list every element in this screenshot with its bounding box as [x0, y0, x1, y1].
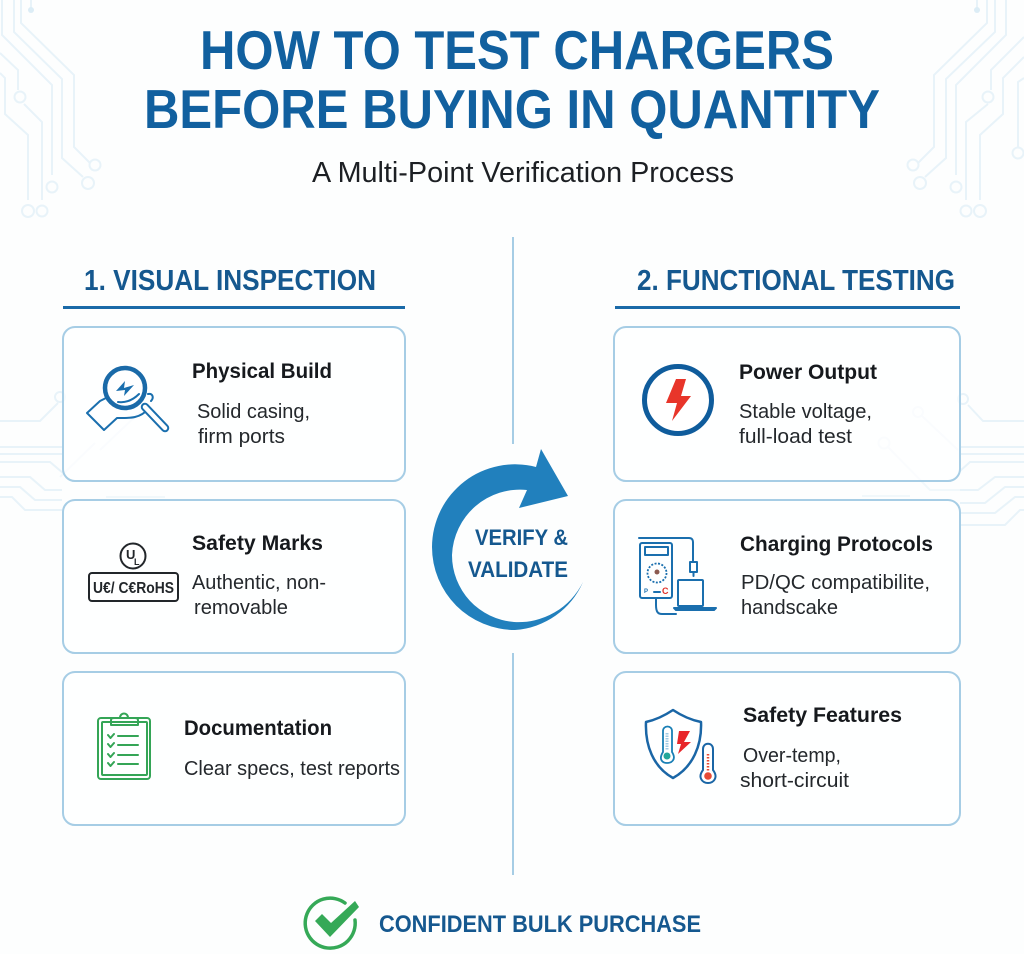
- panel: safety marks: Safety Marks: [192, 532, 323, 555]
- panel: power output: [614, 327, 960, 481]
- heading: functional testing: [615, 265, 960, 309]
- panel: documentation: Clear specs, test reports: [184, 757, 400, 780]
- icon: clipboard checklist: [98, 714, 150, 779]
- subtitle: A Multi-Point Verification Process: [312, 157, 734, 189]
- panel: safety features: short-circuit: [740, 769, 849, 792]
- title: [144, 19, 880, 140]
- panel: physical build: Physical Build: [192, 360, 332, 383]
- icon: certification marks: U€/ C€RoHS: [93, 580, 174, 597]
- arrow label: [468, 525, 568, 582]
- title: HOW TO TEST CHARGERS: [200, 19, 834, 81]
- panel: documentation: [63, 672, 405, 825]
- center cycle arrow: [432, 449, 583, 630]
- icon: power bolt: [644, 366, 712, 434]
- panel: safety marks: [63, 500, 405, 653]
- icon: magnifier and hand: [87, 368, 165, 430]
- panel: safety features: Over-temp,: [743, 744, 841, 767]
- title: BEFORE BUYING IN QUANTITY: [144, 78, 880, 140]
- circuit background: top right: [908, 0, 1024, 217]
- panel: physical build: firm ports: [198, 425, 285, 448]
- panel: safety features: Safety Features: [743, 704, 902, 727]
- panel: safety features: [614, 672, 960, 825]
- heading: visual inspection: 1. VISUAL INSPECTION: [84, 265, 376, 297]
- panel: power output: full-load test: [739, 425, 852, 448]
- panel: physical build: Solid casing,: [197, 400, 310, 423]
- circuit background: middle left: [0, 392, 165, 510]
- icon: green check: [305, 898, 359, 948]
- heading: functional testing: 2. FUNCTIONAL TESTING: [637, 265, 955, 297]
- conclusion text: CONFIDENT BULK PURCHASE: [379, 911, 701, 938]
- panel: power output: Power Output: [739, 361, 877, 384]
- panel: safety marks: Authentic, non-: [192, 571, 326, 594]
- panel: charging protocols: Charging Protocols: [740, 533, 933, 556]
- icon: multimeter and laptop: P: [644, 589, 648, 595]
- arrow label: VALIDATE: [468, 557, 568, 582]
- panel: charging protocols: [614, 500, 960, 653]
- circuit background: middle right: [862, 394, 1024, 525]
- icon: multimeter and laptop: C: [662, 586, 669, 596]
- icon: certification marks: U: [126, 547, 135, 562]
- panel: power output: Stable voltage,: [739, 400, 872, 423]
- heading: visual inspection: [63, 265, 405, 309]
- icon: certification marks: L: [134, 557, 140, 567]
- center divider: [512, 237, 514, 875]
- arrow label: VERIFY &: [475, 525, 568, 550]
- panel: documentation: Documentation: [184, 717, 332, 740]
- icon: certification marks: [89, 544, 178, 601]
- panel: physical build: [63, 327, 405, 481]
- icon: shield and thermometers: [646, 710, 716, 783]
- panel: safety marks: removable: [194, 596, 288, 619]
- circuit background: top left: [0, 0, 100, 217]
- panel: charging protocols: PD/QC compatibilite,: [741, 571, 930, 594]
- panel: charging protocols: handscake: [741, 596, 838, 619]
- icon: multimeter and laptop: [639, 538, 716, 614]
